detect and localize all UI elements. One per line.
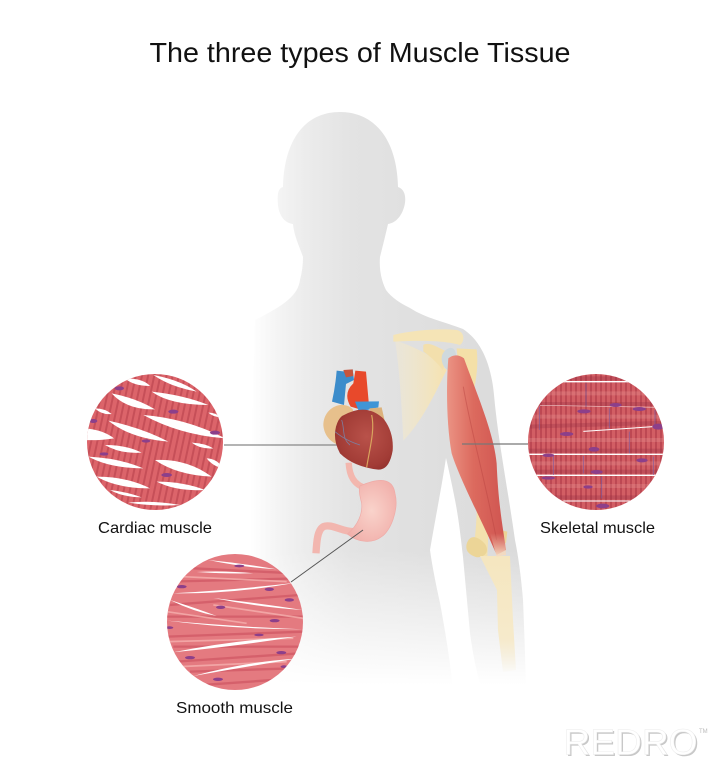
connector line: cardiac xyxy=(224,444,346,446)
stomach xyxy=(316,463,396,553)
title: The three types of Muscle Tissue xyxy=(150,37,570,68)
body silhouette xyxy=(230,112,540,695)
arm muscles xyxy=(447,355,506,557)
circle: cardiac muscle xyxy=(85,372,225,512)
connector line: smooth xyxy=(291,530,363,582)
circle: smooth muscle xyxy=(165,552,305,692)
watermark: TM xyxy=(699,729,708,735)
label: skeletal muscle: Skeletal muscle xyxy=(540,520,655,537)
shoulder and arm bones xyxy=(393,329,516,672)
label: cardiac muscle: Cardiac muscle xyxy=(98,520,212,537)
label: smooth muscle: Smooth muscle xyxy=(176,700,293,717)
heart xyxy=(323,369,393,470)
watermark: REDRO xyxy=(565,723,699,764)
circle: skeletal muscle xyxy=(525,372,667,512)
watermark: REDRO xyxy=(564,722,698,762)
connector line: skeletal xyxy=(462,443,528,445)
